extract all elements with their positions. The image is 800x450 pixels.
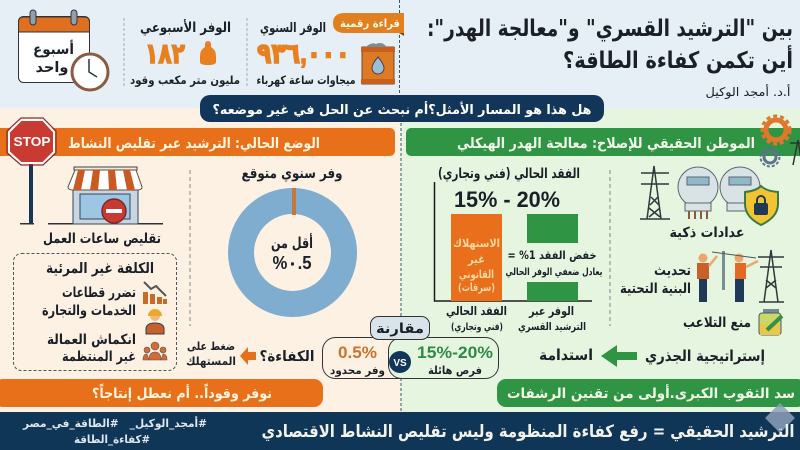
label: megawatt hours: ميجاوات ساعة كهرباء xyxy=(256,73,356,88)
question bar: هل هذا هو المسار الأمثل؟أم نبحث عن الحل في غير موضعه؟ xyxy=(212,101,592,118)
icon: stop sign xyxy=(7,118,56,224)
icon: meters xyxy=(678,167,760,219)
text: infrastructure: البنية التحتية xyxy=(620,281,691,297)
box: limited saving xyxy=(322,338,412,378)
text: pressure on consumer xyxy=(186,339,236,368)
footer band xyxy=(0,403,800,450)
text: percent: %٠.5 xyxy=(272,253,312,273)
stat: annual saving xyxy=(256,21,395,88)
bar: orange xyxy=(451,214,502,301)
heading: left panel: الوضع الحالي: الترشيد عبر تقليص النشاط xyxy=(68,136,320,152)
dashed divider left xyxy=(189,170,191,326)
heading: right panel: الموطن الحقيقي للإصلاح: معالجة الهدر الهيكلي xyxy=(457,136,755,152)
icon: watermark diamond xyxy=(765,403,795,433)
heading: right panel xyxy=(406,128,800,156)
bar: orange: غير xyxy=(467,253,485,266)
pill: comparison xyxy=(370,316,430,340)
number: annual saving: ٩٣٦,٠٠٠ xyxy=(257,38,350,69)
text: one week: أسبوع xyxy=(33,40,74,58)
callout: left bottom: نوفر وقوداً.. أم نعطل إنتاجاً؟ xyxy=(92,383,272,402)
label: forced rationing: الترشيد القسري xyxy=(518,321,586,333)
text: prevent tampering: منع التلاعب xyxy=(683,315,751,331)
box: limited saving: 0.5% xyxy=(338,343,377,362)
icon: clock xyxy=(72,54,108,90)
box: limited saving: وفر محدود xyxy=(330,364,385,377)
icon: green arrow xyxy=(601,345,637,367)
text: cut loss equals: خفض الفقد 1% = xyxy=(508,248,596,262)
icon: fuel barrel xyxy=(361,43,395,84)
icon: calendar one week xyxy=(18,10,108,90)
pill: comparison: مقارنة xyxy=(376,321,424,337)
number: weekly saving: ١٨٢ xyxy=(145,38,185,69)
heading: expected saving: وفر سنوي متوقع xyxy=(242,166,342,183)
text: pressure on consumer: ضغط على xyxy=(187,339,235,353)
text: one week: واحد xyxy=(36,60,68,76)
icon: people group xyxy=(143,342,167,360)
heading: left panel xyxy=(0,128,395,156)
label: weekly saving: الوفر الأسبوعي xyxy=(140,19,231,36)
text: informal labour: انكماش العمالة xyxy=(47,332,136,348)
label: forced rationing: الوفر عبر xyxy=(528,304,574,319)
icon: orange arrow xyxy=(240,347,256,365)
icon: tower xyxy=(640,166,670,219)
bar: green bottom xyxy=(527,282,578,301)
text: less than: أقل من xyxy=(271,233,313,252)
text: services and trade: الخدمات والتجارة xyxy=(42,303,136,319)
icon: shield lock xyxy=(745,186,778,225)
tag: digital reading xyxy=(333,13,404,36)
title xyxy=(427,16,793,74)
text: informal labour 2: غير المنتظمة xyxy=(62,349,136,365)
text: one week xyxy=(33,40,74,76)
question bar xyxy=(200,95,604,122)
icon: falling chart xyxy=(143,282,167,304)
stat: weekly saving xyxy=(130,19,240,88)
label: annual saving: الوفر السنوي xyxy=(260,21,326,36)
text: infrastructure: تحديث xyxy=(654,263,691,279)
text: hashtags: #كفاءة_الطاقة xyxy=(74,433,150,446)
text: radical strategy: إستراتيجية الجذري xyxy=(645,347,765,366)
bar: green top xyxy=(527,214,578,243)
label: current loss: (فني وتجاري) xyxy=(451,322,503,333)
callout: right bottom xyxy=(497,379,800,407)
dashed top divider xyxy=(398,0,400,95)
badge: versus xyxy=(389,351,411,373)
dashed divider right xyxy=(609,170,611,326)
icon: tower top right xyxy=(790,140,800,165)
label: forced rationing xyxy=(518,304,586,333)
heading: invisible cost: الكلفة غير المرئية xyxy=(46,261,154,277)
icon: workers and tower xyxy=(697,250,784,302)
text: sustainability: استدامة xyxy=(539,346,593,364)
heading: loss: الفقد الحالي (فني وتجاري) xyxy=(438,166,580,183)
label: current loss xyxy=(446,304,507,333)
text: reduce hours: تقليص ساعات العمل xyxy=(43,231,161,247)
icon: closed shop xyxy=(48,167,163,224)
panel: invisible cost xyxy=(14,254,176,370)
text: infrastructure xyxy=(620,263,691,297)
bar: orange: الاستهلاك xyxy=(453,237,500,250)
text: efficiency: الكفاءة؟ xyxy=(260,349,314,365)
label: current loss: الفقد الحالي xyxy=(446,304,507,318)
bar: orange: القانوني xyxy=(459,268,494,281)
text: loss number: 15% - 20% xyxy=(454,187,560,212)
text: hashtags: #أمجد_الوكيل_ #الطاقة_في_مصر xyxy=(22,416,207,430)
badge: versus: VS xyxy=(393,358,407,369)
chart axes xyxy=(434,182,592,301)
chart: donut xyxy=(241,188,344,304)
text: hashtags xyxy=(22,416,207,446)
text: pressure on consumer: المستهلك xyxy=(186,354,236,368)
text: smart meters: عدادات ذكية xyxy=(670,225,744,241)
box: huge opportunities: 15%-20% xyxy=(417,343,493,362)
comparison panel xyxy=(322,316,498,378)
icon: worker xyxy=(146,309,164,334)
tag: digital reading: قراءة رقمية xyxy=(340,17,400,30)
author: أ.د. أمجد الوكيل xyxy=(706,84,790,100)
chart: current loss xyxy=(434,166,603,333)
icon: stop sign: STOP xyxy=(14,135,50,149)
text: harm to services: تضرر قطاعات xyxy=(62,285,136,301)
icon: gas bottle xyxy=(200,41,216,65)
box: huge opportunities: فرص هائلة xyxy=(428,364,482,377)
panel: right real reform xyxy=(401,108,800,412)
bar: orange: (سرقات) xyxy=(458,281,495,294)
icon: jar with arrow xyxy=(759,309,782,335)
callout: right bottom: سد الثقوب الكبرى.أولى من تقنين الرشفات xyxy=(507,384,795,402)
icon: gears xyxy=(760,116,790,166)
label: million cubic metres: مليون متر مكعب وقود xyxy=(130,73,240,88)
box: huge opportunities xyxy=(388,338,498,378)
text: equals twice: يعادل ضعفي الوفر الحالي xyxy=(506,267,603,278)
callout: left bottom xyxy=(0,379,323,407)
